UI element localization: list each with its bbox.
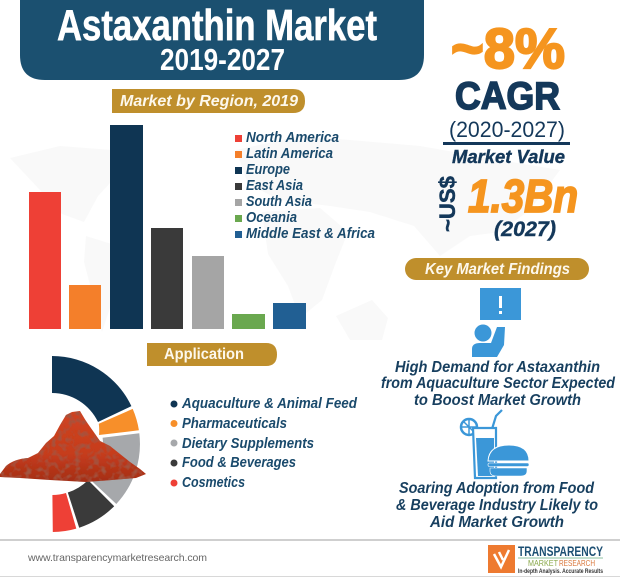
legend: applications: Aquaculture & Animal Feed — [181, 395, 358, 412]
CAGR stat: ~8% — [451, 17, 565, 81]
finding 1 text: High Demand for Astaxanthin — [395, 359, 600, 376]
logo: Transparency Market Research — [488, 544, 603, 575]
market value stat: ~US$ — [435, 176, 460, 232]
legend: applications — [170, 395, 358, 491]
footer website url: www.transparencymarketresearch.com — [27, 552, 207, 564]
badge: key market findings: Key Market Findings — [425, 261, 570, 278]
legend: applications: Food & Beverages — [182, 454, 296, 471]
market value stat — [435, 147, 578, 241]
finding 1 text — [381, 359, 616, 409]
logo: Transparency Market Research: MARKET — [528, 558, 558, 568]
finding 2 text: Soaring Adoption from Food — [399, 480, 595, 497]
legend: regions: North America — [246, 129, 339, 146]
badge: market by region — [112, 89, 305, 113]
legend: regions: East Asia — [246, 177, 303, 194]
icon: person holding exclamation sign — [472, 288, 521, 357]
donut chart: application — [52, 356, 140, 532]
market value stat: 1.3Bn — [468, 170, 578, 222]
badge: application — [147, 343, 277, 366]
image: red astaxanthin powder pile — [0, 411, 146, 482]
title: Astaxanthin Market — [57, 1, 377, 50]
legend: regions — [235, 129, 375, 242]
market value stat: (2027) — [494, 218, 556, 241]
bar chart: market by region — [29, 125, 306, 329]
finding 2 text — [396, 480, 598, 531]
legend: applications: Pharmaceuticals — [182, 415, 287, 432]
legend: applications: Cosmetics — [182, 474, 245, 491]
icon: drink and burger — [461, 410, 529, 478]
badge: key market findings — [405, 258, 589, 280]
legend: regions: Middle East & Africa — [246, 225, 375, 242]
CAGR stat: CAGR — [455, 75, 560, 118]
finding 2 text: Aid Market Growth — [429, 514, 564, 531]
legend: regions: Latin America — [246, 145, 333, 162]
finding 2 text: & Beverage Industry Likely to — [396, 497, 598, 514]
finding 1 text: to Boost Market Growth — [414, 392, 581, 409]
legend: regions: Oceania — [246, 209, 297, 226]
subtitle: 2019-2027 — [160, 42, 285, 77]
legend: applications: Dietary Supplements — [182, 435, 314, 452]
CAGR stat: (2020-2027) — [449, 117, 565, 142]
badge: market by region: Market by Region, 2019 — [120, 93, 298, 110]
CAGR stat — [443, 17, 570, 145]
background world map — [10, 136, 560, 340]
legend: regions: South Asia — [246, 193, 312, 210]
badge: application: Application — [164, 346, 244, 363]
legend: regions: Europe — [246, 161, 290, 178]
market value stat: Market Value — [452, 147, 565, 167]
logo: Transparency Market Research: RESEARCH — [559, 558, 595, 568]
title banner — [20, 0, 424, 80]
